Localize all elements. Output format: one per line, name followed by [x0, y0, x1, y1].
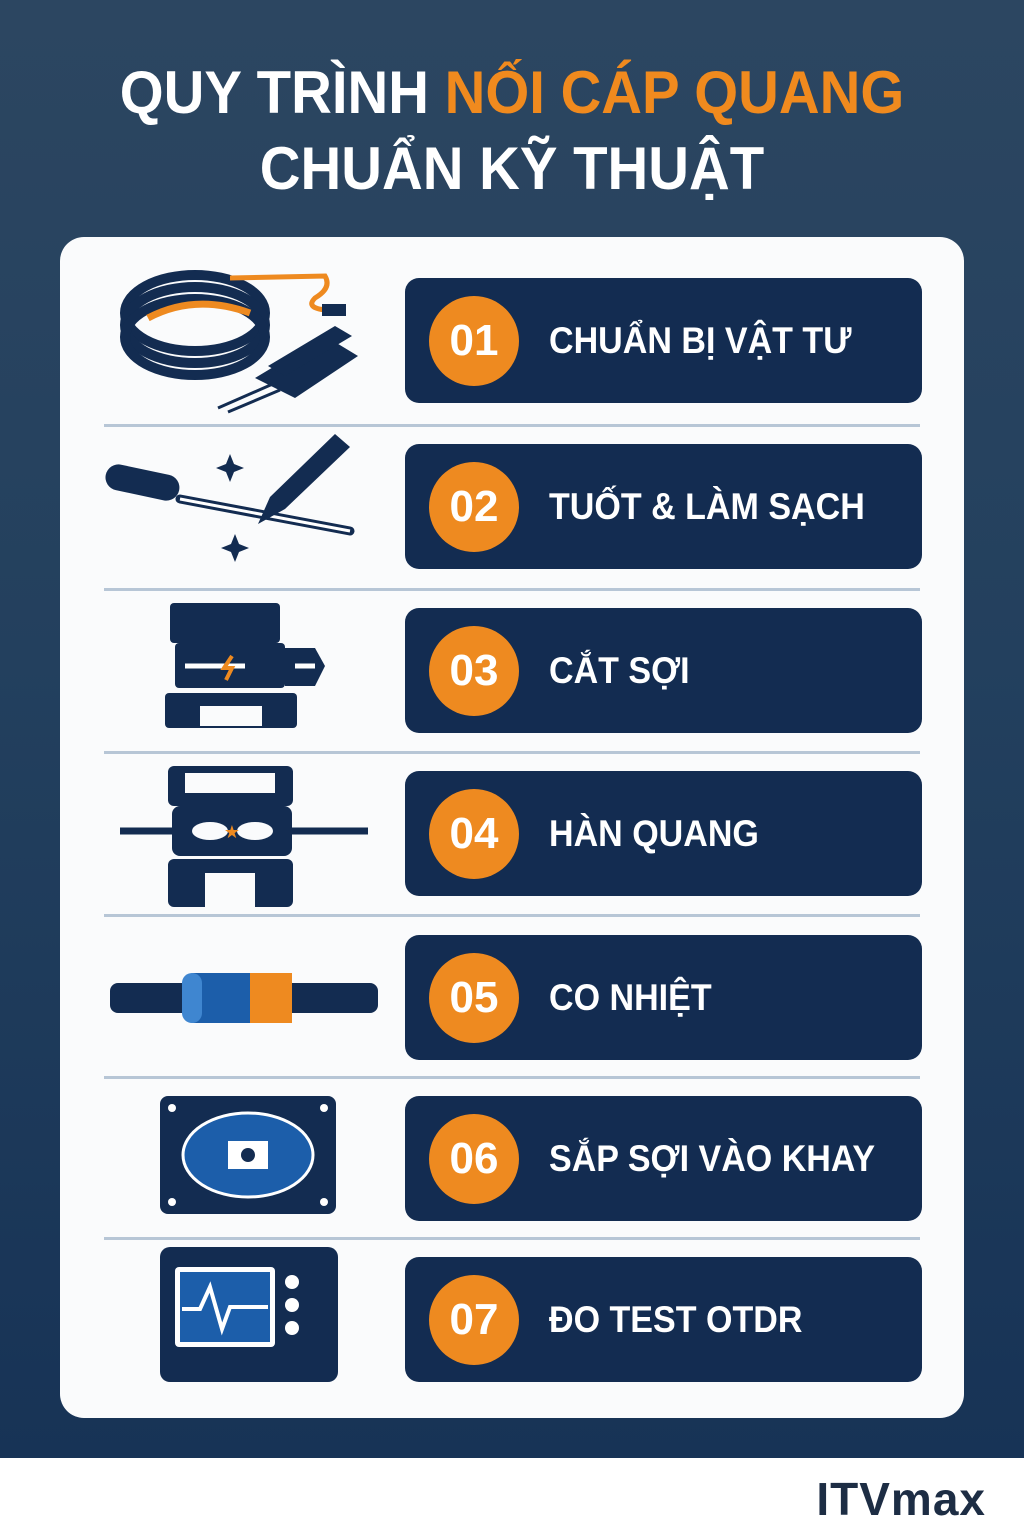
title: CHUẨN KỸ THUẬT [260, 135, 764, 202]
step 5: 05 [450, 973, 498, 1022]
icon: fusion splicer [120, 766, 368, 907]
step 7: 07 [450, 1295, 498, 1344]
title [120, 59, 904, 202]
step 2 [106, 434, 922, 569]
icon: fusion splicer: ★ [224, 822, 240, 842]
step 2: 02 [450, 482, 498, 531]
step 5: CO NHIỆT [549, 977, 712, 1018]
step 2: TUỐT & LÀM SẠCH [549, 486, 865, 527]
step 6 [160, 1096, 922, 1221]
panel: steps [60, 237, 964, 1418]
step 4: 04 [450, 809, 498, 858]
logo: ITVmax [816, 1473, 986, 1525]
step 6: SẮP SỢI VÀO KHAY [549, 1138, 875, 1179]
icon: heat shrink tube [110, 973, 378, 1023]
step 6: 06 [450, 1134, 498, 1183]
icon: cleaver [165, 603, 325, 728]
step 1 [120, 270, 922, 414]
step 3: 03 [450, 646, 498, 695]
step 1: 01 [450, 316, 498, 365]
icon: cable coil [120, 270, 358, 414]
icon: OTDR [160, 1247, 338, 1382]
step 3: CẮT SỢI [549, 650, 690, 691]
icon: stripper and pen [106, 434, 354, 562]
step 3 [165, 603, 922, 733]
step 5 [110, 935, 922, 1060]
step 4 [120, 766, 922, 907]
step 4: HÀN QUANG [549, 813, 759, 854]
title: QUY TRÌNH NỐI CÁP QUANG [120, 59, 904, 126]
step 7 [160, 1247, 922, 1382]
step 7: ĐO TEST OTDR [549, 1299, 802, 1340]
step 1: CHUẨN BỊ VẬT TƯ [549, 320, 851, 361]
icon: splice tray [160, 1096, 336, 1214]
